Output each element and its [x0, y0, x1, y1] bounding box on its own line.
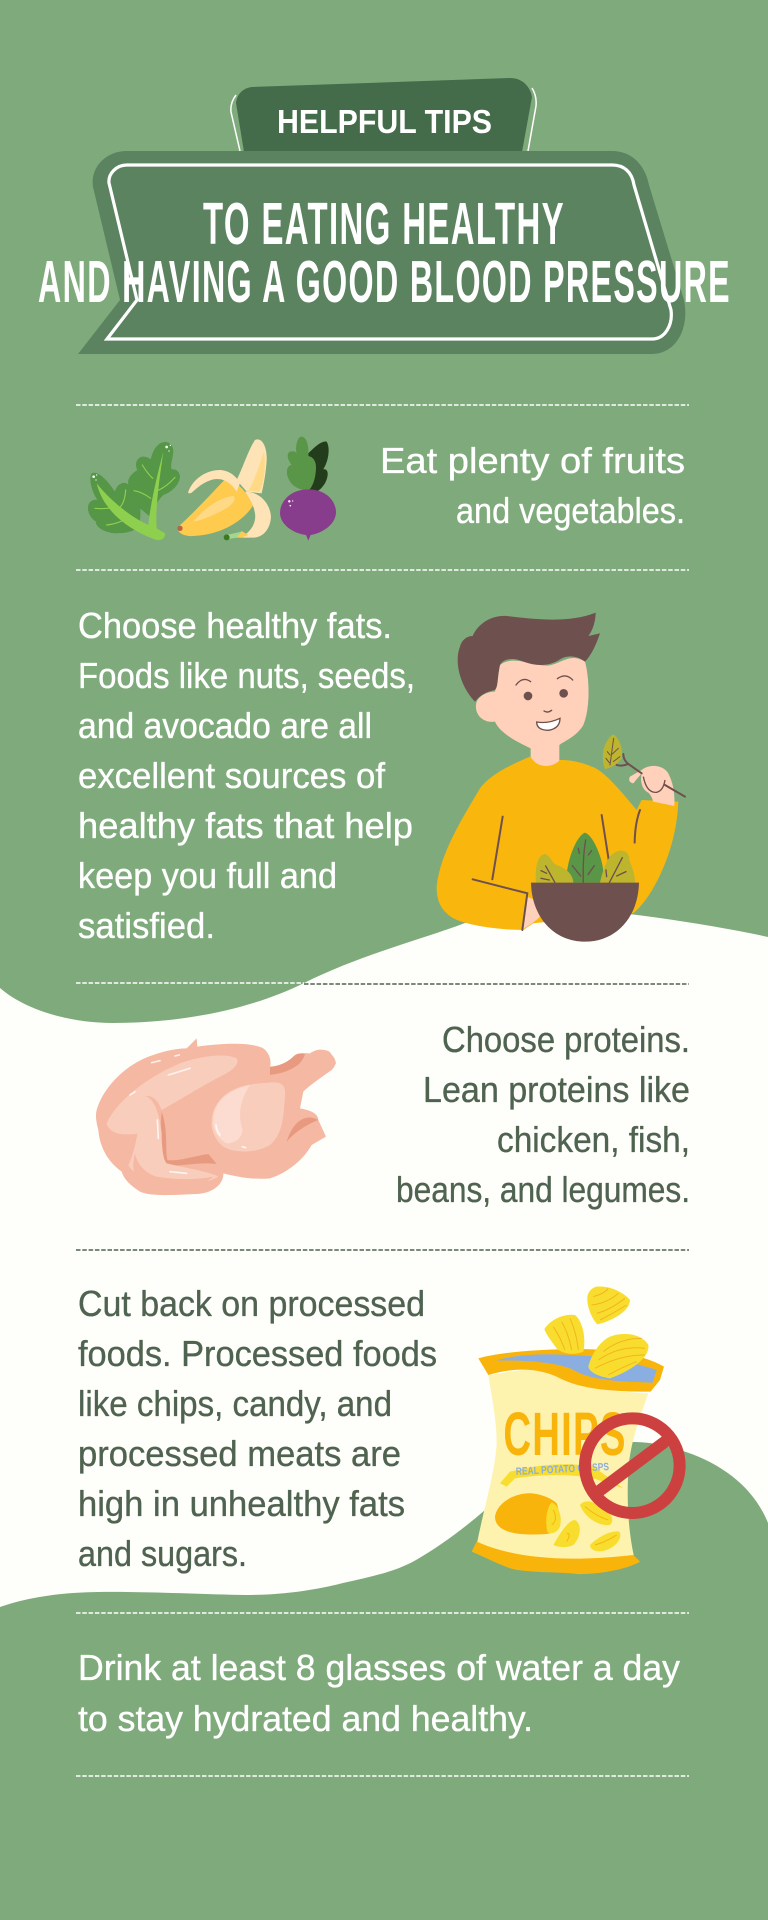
text: proteins: Lean proteins like: [423, 1069, 690, 1110]
panel: water: to stay hydrated and healthy.: [78, 1698, 533, 1739]
hand holding fork: [603, 734, 685, 806]
icon: beet: [280, 437, 336, 541]
text: processed foods: Cut back on processed: [78, 1283, 425, 1324]
text: processed foods: high in unhealthy fats: [78, 1483, 405, 1524]
chicken highlights: [130, 1055, 246, 1173]
chips bag: REAL POTATO CRISPS: [516, 1461, 609, 1478]
panel: fruits and vegetables: [88, 437, 685, 541]
panel: water: Drink at least 8 glasses of water a day: [78, 1647, 680, 1688]
text: processed foods: foods. Processed foods: [78, 1333, 437, 1374]
text: healthy fats: Foods like nuts, seeds,: [78, 655, 415, 696]
chicken body: [96, 1038, 335, 1195]
left hand: [522, 897, 540, 930]
text: processed foods: like chips, candy, and: [78, 1383, 392, 1424]
icon: spinach, banana and beet: [88, 437, 336, 541]
text: healthy fats: and avocado are all: [78, 705, 372, 746]
icon: spinach: [88, 442, 180, 540]
tab: helpful tips: [231, 78, 536, 152]
chicken wing: [128, 1096, 218, 1184]
text: proteins: [396, 1019, 690, 1210]
sweater seams: [473, 810, 640, 930]
tab: helpful tips: HELPFUL TIPS: [277, 103, 492, 140]
illustration: chips bag with no sign: [472, 1286, 680, 1574]
text: healthy fats: Choose healthy fats.: [78, 605, 392, 646]
text: proteins: chicken, fish,: [497, 1119, 690, 1160]
illustration: boy eating salad: [437, 613, 685, 942]
salad leaves: [536, 833, 635, 883]
no sign: [585, 1418, 680, 1513]
facial features: [516, 676, 573, 730]
panel: water: [78, 1647, 680, 1739]
text: fruits and vegetables: and vegetables.: [456, 490, 685, 531]
text: fruits and vegetables: Eat plenty of fruits: [380, 440, 685, 481]
salad bowl: [531, 883, 639, 942]
text: healthy fats: satisfied.: [78, 905, 215, 946]
panel: proteins: [96, 1019, 690, 1210]
text: healthy fats: keep you full and: [78, 855, 337, 896]
title ribbon: [78, 151, 685, 354]
text: processed foods: processed meats are: [78, 1433, 401, 1474]
icon: banana: [177, 439, 271, 540]
text: processed foods: and sugars.: [78, 1533, 247, 1574]
chicken drumstick: [200, 1050, 336, 1167]
text: healthy fats: [78, 605, 415, 946]
panel: healthy fats: [78, 605, 685, 946]
text: fruits and vegetables: [380, 440, 685, 531]
falling chips: [544, 1286, 648, 1378]
panel: processed foods: [78, 1283, 680, 1574]
title text: [38, 191, 731, 315]
text: processed foods: [78, 1283, 437, 1574]
header banner: [38, 78, 731, 354]
text: healthy fats: healthy fats that help: [78, 805, 413, 846]
hair: [458, 613, 600, 702]
illustration: raw chicken: [96, 1038, 336, 1195]
text: proteins: Choose proteins.: [442, 1019, 690, 1060]
chips bag: CHIPS: [503, 1400, 627, 1469]
white wave band: [0, 908, 768, 1607]
chicken shading: [161, 1053, 318, 1166]
text: proteins: beans, and legumes.: [396, 1169, 690, 1210]
face and neck: [476, 658, 589, 766]
sweater: [437, 757, 678, 930]
text: healthy fats: excellent sources of: [78, 755, 386, 796]
chips bag: [472, 1349, 664, 1574]
